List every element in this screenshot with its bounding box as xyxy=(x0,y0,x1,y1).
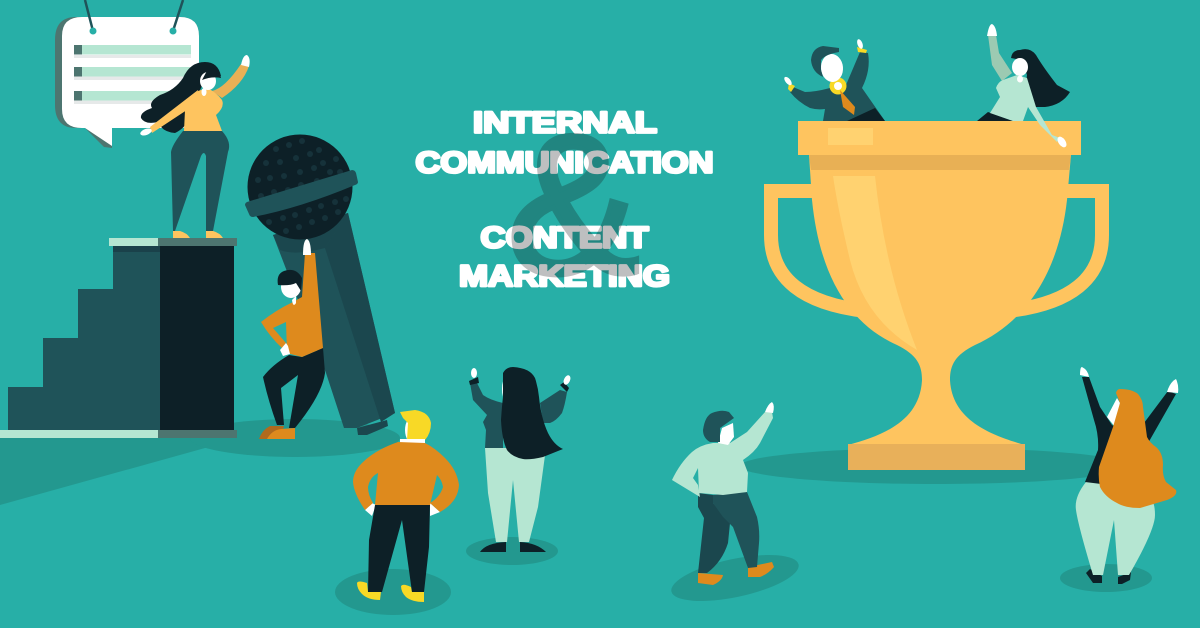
ground shadows xyxy=(0,419,1152,615)
man in mint shirt waving xyxy=(672,402,774,585)
woman in mint on trophy xyxy=(977,24,1070,149)
podium with stairs xyxy=(0,238,237,438)
title text xyxy=(416,107,714,293)
man pushing microphone xyxy=(259,239,325,439)
speech bubble board xyxy=(55,0,199,148)
woman on podium xyxy=(139,55,250,238)
man in orange seen from behind xyxy=(353,410,459,602)
woman with orange hair xyxy=(1076,367,1178,584)
trophy xyxy=(771,121,1102,470)
heading line: internal: INTERNAL xyxy=(473,107,657,140)
woman with long black hair xyxy=(469,367,572,552)
heading line: marketing: MARKETING xyxy=(459,260,670,293)
large ampersand: & xyxy=(507,94,640,316)
giant microphone xyxy=(245,134,395,435)
heading line: communication: COMMUNICATION xyxy=(416,147,714,180)
man in suit on trophy xyxy=(783,38,885,121)
heading line: content: CONTENT xyxy=(480,222,648,255)
